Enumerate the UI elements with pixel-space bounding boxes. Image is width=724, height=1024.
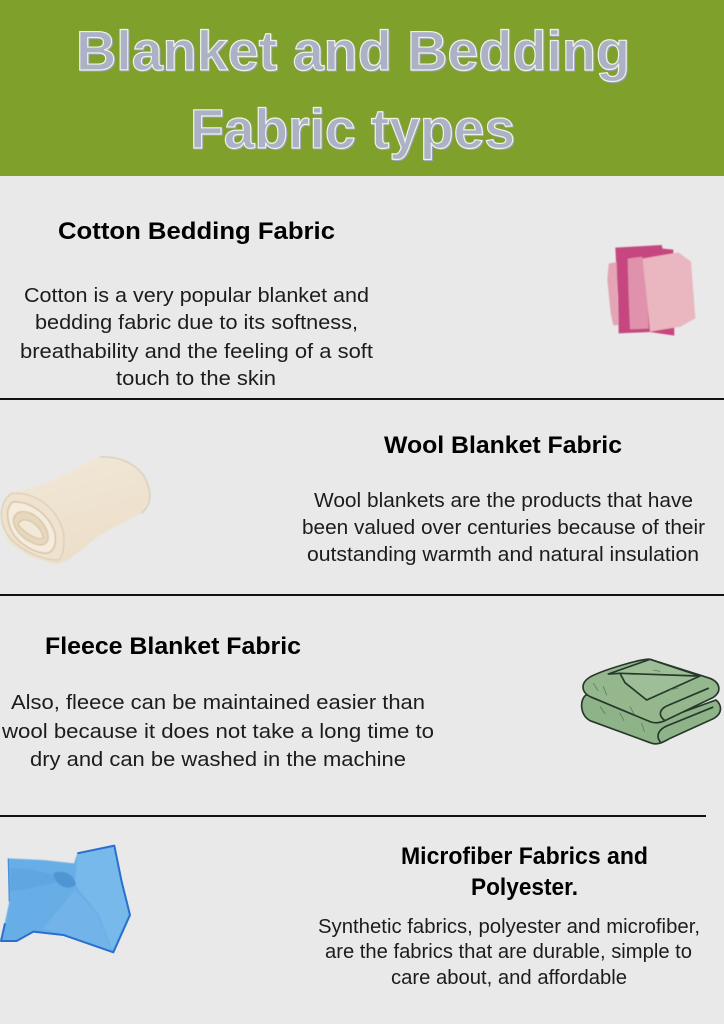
divider [0, 815, 706, 817]
heading: wool: Wool Blanket Fabric [384, 432, 622, 459]
text block: wool: Wool blankets are the products that have [314, 490, 693, 512]
title [76, 19, 630, 160]
text block: microfiber: care about, and affordable [391, 967, 627, 989]
heading: microfiber [401, 843, 648, 901]
text block: fleece: Also, fleece can be maintained easier than [11, 692, 425, 714]
icon: folded green blanket [582, 659, 720, 744]
text block: fleece: wool because it does not take a long time to [1, 721, 434, 743]
panel: fleece blanket fabric [1, 633, 720, 771]
heading: fleece: Fleece Blanket Fabric [45, 633, 301, 660]
panel: wool blanket fabric [1, 432, 705, 566]
header banner [0, 0, 724, 176]
text block: fleece [1, 692, 434, 771]
icon: blue microfiber cloth [1, 846, 130, 952]
heading: microfiber: Microfiber Fabrics and [401, 843, 648, 870]
text block: cotton: Cotton is a very popular blanket and [24, 285, 369, 307]
divider [0, 594, 724, 596]
text block: microfiber: are the fabrics that are durable, simple to [325, 941, 692, 963]
icon: pink cotton swatches [607, 245, 695, 336]
divider [0, 398, 724, 400]
panel: microfiber fabrics and polyester [1, 843, 700, 989]
title: Fabric types [190, 97, 515, 160]
text block: cotton: touch to the skin [116, 368, 276, 390]
panel: cotton bedding fabric [20, 218, 695, 390]
text block: wool: outstanding warmth and natural insulation [307, 544, 699, 566]
text block: microfiber [318, 916, 700, 989]
text block: cotton: breathability and the feeling of a soft [20, 341, 373, 363]
text block: wool [302, 490, 705, 566]
heading: cotton: Cotton Bedding Fabric [58, 218, 335, 245]
text block: fleece: dry and can be washed in the machine [30, 749, 406, 771]
title: Blanket and Bedding [76, 19, 630, 82]
text block: cotton [20, 285, 373, 390]
text block: cotton: bedding fabric due to its softness, [35, 312, 358, 334]
icon: rolled wool blanket [1, 457, 150, 564]
text block: wool: been valued over centuries because of their [302, 517, 705, 539]
text block: microfiber: Synthetic fabrics, polyester and microfiber, [318, 916, 700, 938]
heading: microfiber: Polyester. [471, 874, 578, 901]
